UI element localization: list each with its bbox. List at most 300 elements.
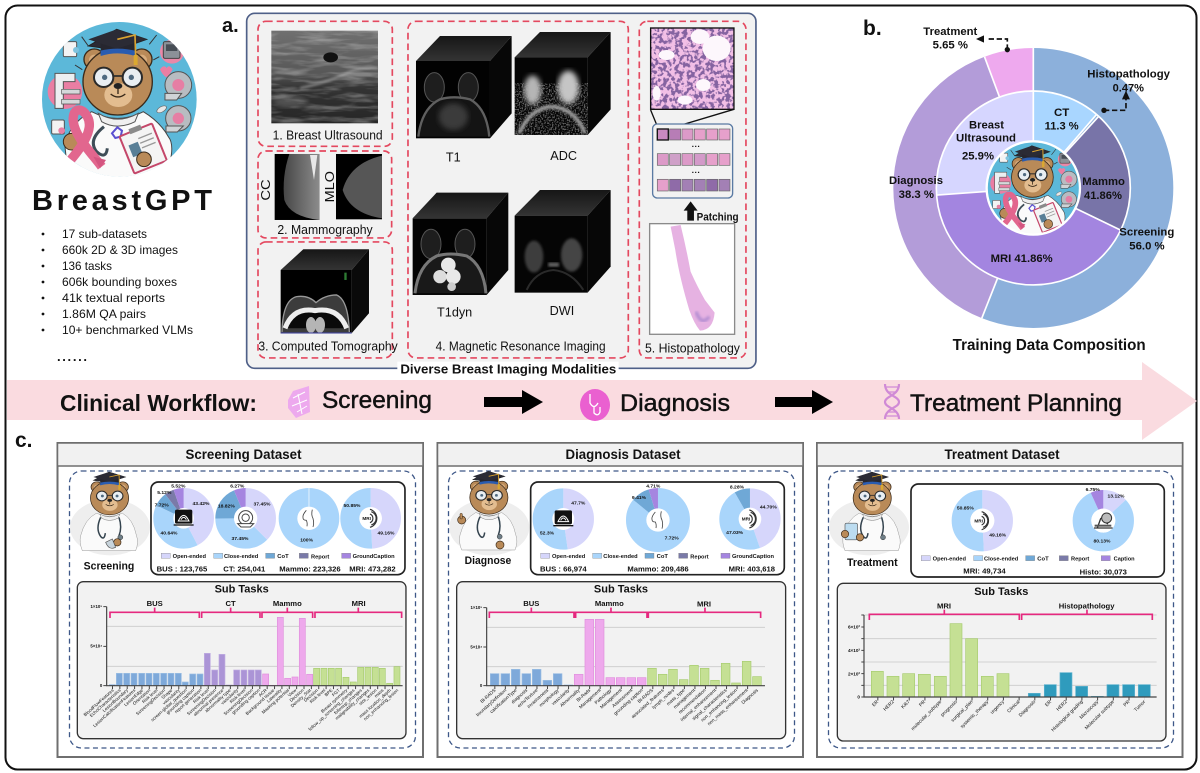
- x labels: Decision: [303, 687, 319, 703]
- x labels: non_enhancing_lesion: [700, 687, 738, 723]
- pie: BUS: [163, 498, 204, 539]
- pie value labels: 80.13%: [1094, 539, 1111, 545]
- pie value labels: 37.45%: [254, 502, 271, 508]
- ring: workflow stages: [915, 70, 1152, 306]
- image: T1dyn cube: [413, 193, 508, 295]
- pie: BUS: [543, 498, 584, 540]
- legend: CoT: [1037, 556, 1049, 562]
- x labels: internal_enhancement: [679, 687, 717, 722]
- x labels: diagnosis: [510, 687, 529, 705]
- totals: BUS : 123,765: [157, 565, 208, 574]
- x labels: prognosis: [940, 699, 959, 718]
- x labels: Risk level: [309, 688, 326, 704]
- x labels: Risk level: [141, 688, 159, 704]
- pie value labels: 47.7%: [571, 500, 586, 506]
- list: dataset key facts: [42, 227, 193, 364]
- icon: ultrasound: [553, 510, 573, 526]
- header: screening dataset: Screening Dataset: [186, 447, 302, 462]
- totals: Mammo: 209,486: [627, 565, 689, 574]
- x labels: vascularity: [220, 687, 240, 706]
- x labels: size_lesion: [358, 687, 378, 706]
- totals: Mammo: 223,326: [279, 565, 341, 574]
- axes: [483, 608, 765, 688]
- panel: breast ultrasound: 1. Breast Ultrasound: [273, 127, 383, 142]
- chart: diagnosis sub tasks: 5×10⁴: [470, 644, 482, 649]
- label: DWI: DWI: [550, 304, 574, 318]
- panel: breast ultrasound: [258, 21, 392, 146]
- x labels: Risk level: [192, 688, 210, 704]
- chart: screening sub tasks: [77, 582, 406, 739]
- x labels: [475, 687, 759, 726]
- pie: MRI: MRI: [974, 518, 983, 523]
- bars: MRI: [314, 667, 400, 686]
- chart: treatment sub tasks: Sub Tasks: [974, 586, 1028, 598]
- arrow: diagnosis to treatment: [775, 390, 833, 414]
- list: dataset key facts: 17 sub-datasets: [62, 227, 147, 241]
- x labels: ER: [1044, 699, 1053, 708]
- label: CT: [1045, 107, 1079, 132]
- mascot: treatment bear: [829, 472, 909, 569]
- totals: MRI: 403,618: [729, 565, 776, 574]
- x labels: Microscopy: [1079, 699, 1100, 721]
- x labels: LesionEdge: [123, 687, 144, 707]
- x labels: grounding caption: [613, 687, 644, 716]
- list: dataset key facts: ......: [57, 349, 87, 364]
- panel: computed tomography: 3. Computed Tomography: [258, 338, 398, 353]
- x labels: BI-RADS: [637, 688, 654, 704]
- x labels: urgency: [989, 699, 1006, 716]
- panel label: a: a.: [222, 15, 239, 37]
- icon: mammography: [652, 511, 663, 529]
- totals: BUS : 66,974: [540, 565, 587, 574]
- x labels: surgical_plan: [950, 699, 975, 724]
- panel: mammography: MLO: [322, 171, 337, 202]
- pie value labels: 50.85%: [344, 503, 361, 509]
- x labels: Clinical: [1006, 699, 1021, 714]
- x labels: report generation: [174, 687, 203, 714]
- bars: BUS: [109, 673, 203, 686]
- label: breast ultrasound: Ultrasound: [956, 133, 1016, 145]
- legend: [921, 556, 1135, 563]
- chart: screening sub tasks: Sub Tasks: [215, 584, 269, 596]
- chart: screening sub tasks: 5×10⁴: [90, 644, 102, 649]
- panel: mammography: 2. Mammography: [277, 222, 373, 237]
- x labels: non_enhancing_lesion: [363, 687, 400, 721]
- pie value labels: 44.70%: [760, 504, 777, 510]
- bars: BUS: [490, 669, 573, 686]
- x labels: systemic_therapy: [959, 699, 990, 730]
- totals: MRI: 49,734: [963, 567, 1006, 576]
- x labels: vascularity: [162, 687, 181, 706]
- legend: Close-ended: [224, 554, 258, 560]
- panel label: b: b.: [863, 17, 882, 40]
- x labels: [83, 687, 400, 732]
- legend: Report: [690, 554, 709, 560]
- label: patching: Patching: [697, 212, 739, 224]
- x labels: Pathology: [594, 687, 613, 705]
- mascot: treatment bear: Treatment: [847, 557, 898, 569]
- chart group: screening pies: [151, 482, 405, 575]
- icon: screening: [288, 386, 310, 418]
- label: CT: CT: [1054, 107, 1070, 119]
- list: dataset key facts: 660k 2D & 3D images: [62, 243, 178, 257]
- x labels: BI-Rads: [575, 687, 592, 703]
- x labels: Decision: [289, 687, 305, 703]
- x labels: Management: [599, 687, 623, 710]
- callout: treatment: Treatment: [923, 26, 978, 38]
- image: tiled patch grid: [653, 124, 733, 198]
- brackets: [110, 608, 402, 618]
- icon: diagnosis: [580, 389, 610, 421]
- x labels: grounding caption: [165, 687, 195, 715]
- x labels: PR: [918, 699, 927, 708]
- x labels: BI-RADS: [479, 688, 497, 704]
- mascot: diagnose bear: [449, 471, 529, 567]
- label: MRI: MRI 41.86%: [991, 253, 1053, 265]
- legend: [161, 553, 395, 560]
- pie value labels: 40.64%: [161, 530, 178, 536]
- bars: MRI: [871, 624, 1009, 697]
- x labels: malignability_changes: [334, 687, 371, 721]
- icon: CT scanner: [238, 511, 254, 527]
- totals: [963, 567, 1127, 577]
- chart: diagnosis sub tasks: BUS: [523, 599, 539, 608]
- legend: Close-ended: [984, 556, 1018, 562]
- x labels: associated_features: [630, 687, 665, 719]
- chart: diagnosis sub tasks: Sub Tasks: [594, 584, 648, 596]
- header: treatment dataset: [817, 443, 1182, 466]
- callout: histopathology: [1087, 69, 1171, 113]
- x labels: HER2: [1055, 699, 1069, 713]
- heading: diverse breast imaging modalities: Diverse Breast Imaging Modalities: [400, 361, 616, 376]
- label: mammo: 41.86%: [1084, 190, 1122, 202]
- x labels: lymph_nodes: [651, 687, 675, 710]
- callout: treatment: 5.65 %: [933, 40, 968, 52]
- x labels: Diagnosis: [740, 687, 759, 705]
- totals: Histo: 30,073: [1080, 568, 1127, 577]
- chart: treatment sub tasks: 2×10³: [848, 671, 860, 676]
- x labels: ScreeningDecision: [186, 687, 217, 716]
- x labels: View: [287, 687, 298, 698]
- header: diagnosis dataset: [438, 443, 803, 466]
- panel: histopathology: [639, 21, 746, 358]
- panel: mammography: [258, 151, 392, 238]
- chart: treatment sub tasks: 0: [857, 695, 860, 700]
- x labels: Ki67: [900, 699, 912, 710]
- arrow: patching: [684, 201, 698, 221]
- label: screening: 56.0 %: [1129, 241, 1165, 253]
- x labels: abnormal presence: [192, 687, 225, 717]
- label: diagnosis: Diagnosis: [620, 390, 730, 417]
- x labels: mass: [373, 687, 385, 699]
- panel: histopathology: 5. Histopathology: [645, 341, 740, 356]
- pie: MRI: [961, 499, 1004, 542]
- pie value labels: 6.27%: [230, 484, 245, 490]
- chart: screening sub tasks: MRI: [352, 599, 366, 608]
- x labels: boundaryDefinition: [475, 687, 508, 717]
- list: dataset key facts: 10+ benchmarked VLMs: [62, 323, 193, 337]
- list: dataset key facts: 41k textual reports: [62, 291, 165, 305]
- pie: Mammo: [636, 498, 680, 542]
- callout: histopathology: 0.47%: [1113, 83, 1144, 95]
- header: screening dataset: [58, 443, 423, 466]
- mascot: screening bear: Screening: [84, 560, 134, 572]
- pie value labels: 4.71%: [646, 484, 661, 490]
- legend: CoT: [277, 554, 289, 560]
- legend: [541, 553, 774, 560]
- x labels: Abnormality: [559, 687, 581, 708]
- x labels: ScreeningDecision: [135, 687, 166, 716]
- image: whole-slide tissue: [650, 224, 735, 334]
- x labels: EchoCharacteristics: [89, 687, 122, 718]
- panel: mammography: CC: [258, 179, 273, 201]
- panel: diagnosis dataset: [438, 443, 803, 757]
- x labels: ER: [871, 699, 880, 708]
- panel: treatment dataset: [817, 443, 1182, 757]
- chart: treatment sub tasks: 4×10³: [848, 648, 860, 653]
- pie value labels: 50.85%: [957, 505, 974, 511]
- x labels: Histological grading: [1050, 699, 1085, 733]
- header: treatment dataset: Treatment Dataset: [944, 447, 1060, 462]
- pie value labels: 6.75%: [1086, 487, 1100, 493]
- x labels: Management: [578, 687, 602, 710]
- x labels: invasiveness: [526, 687, 550, 709]
- label: diagnosis: Diagnosis: [889, 175, 943, 187]
- axes: [861, 615, 1157, 699]
- x labels: LesionBoundary: [102, 687, 130, 713]
- bars: histopathology: [1028, 673, 1150, 697]
- bars: MRI: [648, 661, 761, 686]
- x labels: Background tissue: [245, 687, 276, 716]
- title: BreastGPT: BreastGPT: [32, 185, 212, 217]
- x labels: abnormality type: [204, 687, 232, 713]
- pie value labels: 5.52%: [171, 484, 186, 490]
- chart: treatment sub tasks: MRI: [937, 601, 951, 610]
- legend: CoT: [657, 554, 669, 560]
- callout: treatment: [923, 26, 1010, 52]
- x labels: Risk level: [229, 688, 246, 704]
- chart: screening sub tasks: 0: [100, 683, 103, 688]
- legend: Report: [311, 554, 330, 560]
- banner: clinical workflow arrow: [7, 362, 1197, 440]
- pie: MRI: MRI: [742, 517, 750, 522]
- pie: MRI: [350, 498, 391, 539]
- mascot: screening bear: [70, 472, 150, 572]
- legend: Report: [1071, 557, 1090, 563]
- image: DWI cube: [515, 190, 611, 293]
- x labels: signal_characteristics: [691, 687, 728, 721]
- separators: [936, 48, 1130, 318]
- x labels: FGT: [331, 688, 341, 697]
- x labels: Masking potential: [261, 688, 290, 715]
- image: tiled patch grid: ···: [692, 167, 700, 177]
- icon: ultrasound: [174, 510, 194, 525]
- label: screening: [1119, 227, 1174, 253]
- arrow: screening to diagnosis: [484, 390, 543, 414]
- axes: [103, 607, 403, 688]
- chart: diagnosis sub tasks: Mammo: [595, 599, 624, 608]
- panel a: imaging modalities: [247, 13, 756, 376]
- legend: Caption: [1114, 556, 1135, 562]
- pie value labels: 13.12%: [1108, 494, 1125, 500]
- label: screening: Screening: [1119, 227, 1174, 239]
- pie value labels: 43.42%: [193, 501, 210, 507]
- label: screening: Screening: [322, 387, 432, 414]
- legend: Open-ended: [933, 556, 966, 562]
- pie value labels: [957, 487, 1125, 545]
- list: dataset key facts: 606k bounding boxes: [62, 275, 177, 289]
- label: diagnosis: 38.3 %: [899, 189, 934, 201]
- x labels: ACR: [258, 687, 269, 698]
- label: ADC: ADC: [550, 149, 577, 163]
- list: dataset key facts: 136 tasks: [62, 259, 112, 273]
- x labels: Orientation: [132, 687, 152, 706]
- label: mammo: Mammo: [1082, 176, 1125, 188]
- pie value labels: 8.28%: [730, 485, 745, 491]
- chart: diagnosis sub tasks: 0: [480, 683, 483, 688]
- pie value labels: 52.3%: [540, 530, 555, 536]
- x labels: PR: [1122, 699, 1132, 708]
- heading: training data composition: Training Data Composition: [953, 337, 1146, 354]
- pie value labels: 37.45%: [232, 536, 249, 542]
- totals: MRI: 473,282: [349, 565, 396, 574]
- x labels: recommendation: [678, 687, 707, 715]
- pie value labels: 18.82%: [218, 504, 235, 510]
- x labels: vascularity: [551, 687, 571, 706]
- pie value labels: 49.16%: [378, 530, 395, 536]
- label: mammo: [1082, 176, 1125, 202]
- x labels: [871, 699, 1147, 733]
- totals: [157, 565, 396, 574]
- bars: Mammo: [263, 617, 313, 686]
- x labels: Tumor: [1133, 699, 1147, 713]
- callout: histopathology: Histopathology: [1087, 69, 1171, 81]
- pie: MRI: [729, 498, 771, 540]
- pie: CT: [225, 498, 266, 539]
- brackets: [869, 610, 1152, 620]
- pie value labels: [155, 484, 395, 543]
- x labels: screen-global_question: [150, 687, 188, 722]
- bars: Mammo: [574, 619, 646, 686]
- mascot: diagnose bear: Diagnose: [465, 555, 511, 567]
- image: ADC cube: [515, 32, 611, 135]
- bars: CT: [204, 653, 261, 686]
- chart: diagnosis sub tasks: MRI: [697, 600, 711, 609]
- x labels: echoTexture: [516, 687, 539, 708]
- x labels: ScreeningDecision: [223, 687, 254, 716]
- x labels: mass location_depth: [358, 687, 392, 719]
- x labels: Assessment: [611, 687, 634, 708]
- x labels: Laterality: [266, 687, 283, 704]
- pie: MRI: MRI: [362, 516, 371, 521]
- x labels: calcificationType: [489, 687, 518, 714]
- x labels: Breast symmetry: [320, 687, 349, 714]
- image: tiled patch grid: ···: [692, 141, 700, 151]
- x labels: Diagnosis: [1018, 699, 1037, 718]
- panel: magnetic resonance imaging: 4. Magnetic Resonance Imaging: [436, 339, 606, 354]
- legend: Close-ended: [603, 554, 638, 560]
- ring: modalities: [962, 116, 1105, 260]
- label: treatment planning: Treatment Planning: [910, 390, 1122, 417]
- label: breast ultrasound: 25.9%: [962, 150, 994, 162]
- x labels: non_mass_enhancement: [706, 687, 749, 726]
- chart: screening sub tasks: 1×10⁵: [91, 604, 102, 609]
- x labels: follow_up_screening_changes: [307, 687, 356, 732]
- chart: diagnosis sub tasks: 1×10⁵: [471, 605, 482, 610]
- label: diagnosis: [889, 175, 943, 201]
- pie value labels: 100%: [300, 537, 314, 543]
- chart group: treatment pies: [911, 484, 1164, 577]
- label: breast ultrasound: [956, 119, 1016, 162]
- chart: screening sub tasks: BUS: [147, 599, 163, 608]
- x labels: followup_changes: [333, 687, 364, 715]
- panel: magnetic resonance imaging: [408, 21, 628, 358]
- panel: screening dataset: [58, 443, 423, 757]
- pie value labels: 49.16%: [989, 532, 1007, 538]
- x labels: molecular_subtype: [910, 699, 943, 732]
- label: T1: T1: [446, 150, 461, 164]
- chart: screening sub tasks: Mammo: [273, 599, 302, 608]
- label: CT: 11.3 %: [1045, 120, 1079, 132]
- x labels: mass_type: [666, 687, 686, 706]
- pie value labels: 7.72%: [155, 503, 169, 509]
- pie value labels: [540, 484, 777, 542]
- x labels: morphology: [538, 687, 560, 708]
- x labels: BloodFlowFeatures: [83, 687, 115, 717]
- label: clinical workflow: Clinical Workflow:: [60, 390, 257, 416]
- x labels: HER2: [882, 699, 896, 713]
- header: diagnosis dataset: Diagnosis Dataset: [566, 447, 681, 462]
- logo: BreastGPT bear: [42, 22, 197, 180]
- pie value labels: 7.72%: [665, 536, 679, 542]
- panel label: c: c.: [15, 429, 33, 452]
- legend: GroundCaption: [353, 554, 395, 560]
- x labels: LesionCalcificationFeatures: [92, 687, 137, 728]
- chart group: diagnosis pies: [531, 482, 784, 575]
- totals: CT: 254,041: [223, 565, 266, 574]
- legend: GroundCaption: [732, 554, 774, 560]
- panel b: training data composition donut: [889, 26, 1174, 354]
- chart: treatment sub tasks: [837, 583, 1166, 741]
- x labels: Molecular subtype: [1084, 699, 1116, 731]
- x labels: Shape: [160, 687, 174, 700]
- label: T1dyn: T1dyn: [437, 305, 472, 319]
- x labels: management: [672, 687, 696, 710]
- legend: Open-ended: [173, 554, 206, 560]
- pie: Mammo: [279, 488, 339, 549]
- centre logo: [987, 141, 1080, 236]
- x labels: BPE: [324, 688, 334, 697]
- chart: treatment sub tasks: Histopathology: [1059, 601, 1115, 610]
- x labels: Density_Stat: [290, 687, 313, 708]
- pie value labels: 9.41%: [632, 495, 647, 501]
- label: breast ultrasound: Breast: [969, 119, 1004, 131]
- totals: [540, 565, 776, 574]
- list: dataset key facts: 1.86M QA pairs: [62, 307, 146, 321]
- image: T1 cube: [416, 36, 512, 138]
- icon: DNA helix: [885, 384, 899, 419]
- chart: diagnosis sub tasks: [457, 582, 786, 739]
- chart: screening sub tasks: CT: [226, 599, 236, 608]
- brackets: [489, 608, 761, 618]
- pie value labels: 5.12%: [157, 490, 172, 496]
- legend: Open-ended: [552, 554, 585, 560]
- x labels: grounding caption: [231, 687, 261, 715]
- chart: treatment sub tasks: 6×10³: [848, 625, 860, 630]
- panel: computed tomography: [258, 242, 398, 358]
- image: zoomed patch: [651, 28, 734, 109]
- pie: Histo: [1082, 499, 1125, 542]
